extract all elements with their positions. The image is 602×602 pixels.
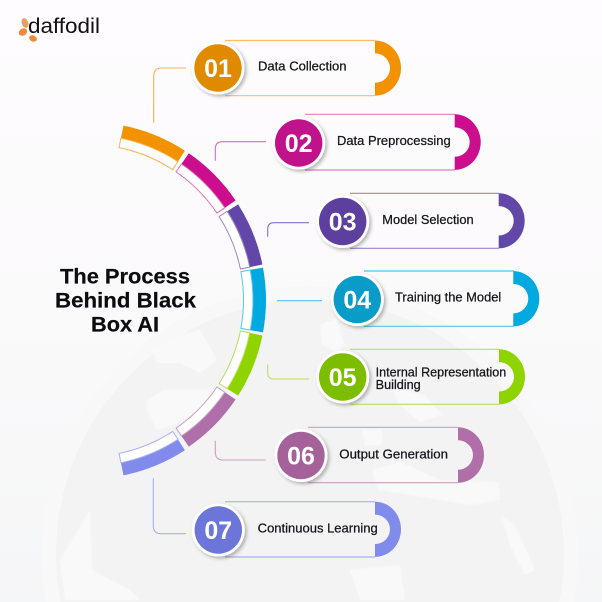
connector 4 — [277, 300, 322, 302]
arc segment 4 — [241, 268, 266, 332]
step 05: Internal Representation Building: Building — [376, 378, 421, 392]
segmented arc — [119, 126, 266, 475]
connector 3 — [268, 223, 309, 237]
step 04: Training the Model: 04 — [343, 286, 371, 314]
arc segment 7 — [119, 431, 185, 475]
connector 2 — [215, 142, 266, 161]
connector 5 — [268, 364, 309, 379]
step 04: Training the Model: Training the Model — [395, 290, 501, 304]
arc segment 2 — [176, 153, 236, 213]
logo: daffodil — [17, 15, 100, 43]
step 07: Continuous Learning: 07 — [204, 517, 232, 545]
step 03: Model Selection: 03 — [329, 208, 357, 236]
step 05: Internal Representation Building: 05 — [329, 364, 357, 392]
arc segment 3 — [219, 204, 262, 269]
step 03: Model Selection — [316, 193, 525, 248]
step 07: Continuous Learning — [192, 502, 401, 557]
logo wordmark: daffodil — [28, 15, 100, 38]
step 01: Data Collection: 01 — [204, 55, 232, 83]
arc segment 6 — [176, 387, 236, 447]
step 01: Data Collection — [192, 40, 401, 96]
title: Behind Black — [55, 290, 196, 313]
title: The Process — [60, 266, 190, 288]
connector 1 — [154, 68, 186, 123]
step 01: Data Collection: Data Collection — [258, 60, 347, 74]
arc segment 1 — [119, 126, 185, 170]
step 07: Continuous Learning: Continuous Learning — [258, 522, 378, 536]
step 02: Data Preprocessing: Data Preprocessing — [337, 134, 451, 148]
step 04: Training the Model — [331, 271, 539, 326]
step 06: Output Generation: Output Generation — [339, 448, 448, 462]
arc segment 5 — [219, 331, 262, 396]
title — [55, 266, 196, 337]
background globe watermark — [42, 286, 578, 602]
icon: logo petals — [17, 17, 38, 43]
step 05: Internal Representation Building — [316, 349, 525, 404]
step 05: Internal Representation Building: Internal Representation — [376, 366, 506, 380]
step 02: Data Preprocessing: 02 — [285, 130, 313, 158]
step 03: Model Selection: Model Selection — [382, 213, 474, 227]
step 06: Output Generation: 06 — [287, 442, 315, 470]
step 06: Output Generation — [274, 427, 484, 483]
step 02: Data Preprocessing — [272, 114, 481, 170]
connector 6 — [215, 441, 266, 460]
title: Box AI — [91, 314, 159, 337]
connector 7 — [153, 478, 186, 534]
